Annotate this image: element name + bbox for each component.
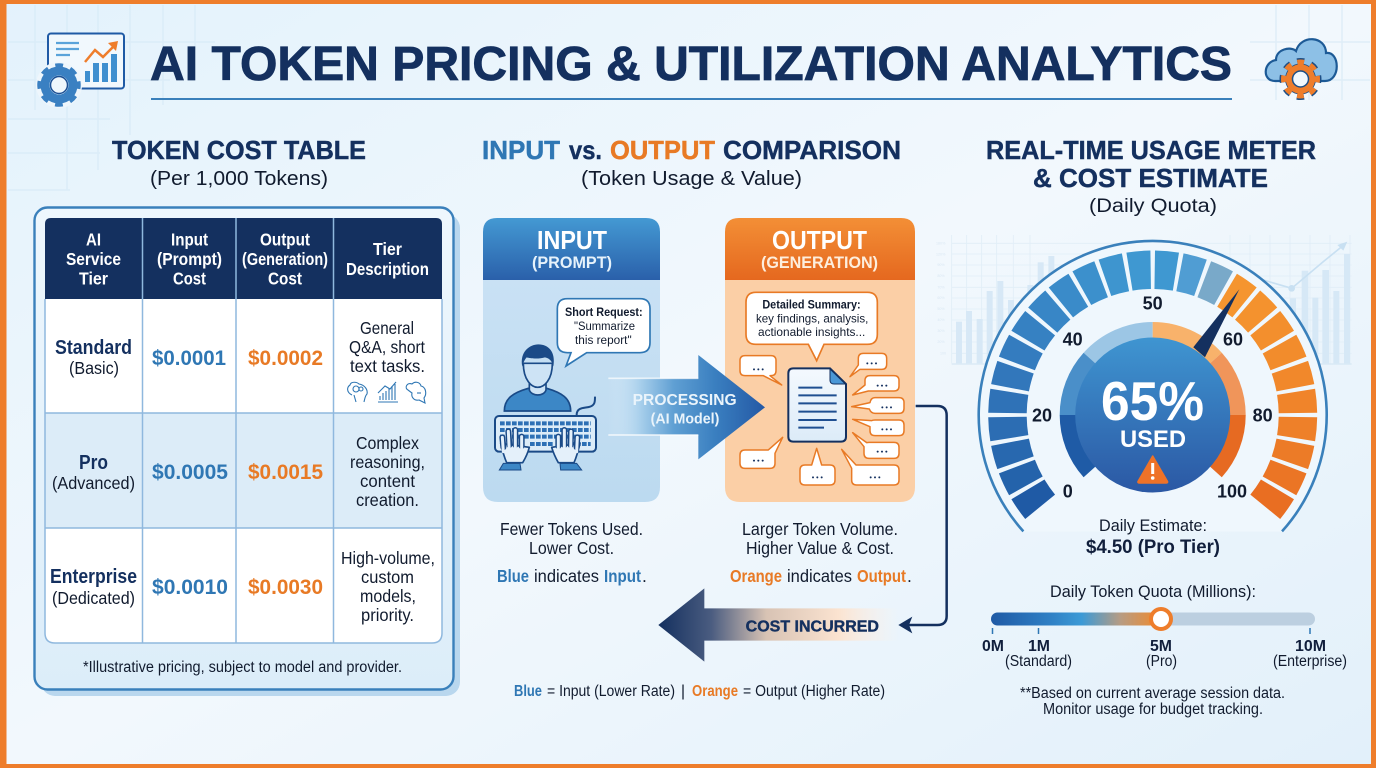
caption: input: Fewer Tokens Used. <box>500 519 643 539</box>
legend: rates <box>514 683 885 700</box>
legend: rates: Blue <box>514 683 542 700</box>
panel: input prompt: (PROMPT) <box>532 253 612 272</box>
row: pro: $0.0005 <box>152 461 228 484</box>
caption: input: Input <box>604 566 641 586</box>
table header: Input <box>171 230 208 250</box>
row: pro: reasoning, <box>350 452 425 472</box>
daily estimate: $4.50 (Pro Tier) <box>1086 536 1220 558</box>
small response bubbles <box>740 353 904 485</box>
background chart behind gauge: 180% <box>936 241 946 245</box>
background chart behind gauge <box>936 235 1352 364</box>
caption: output: indicates <box>787 566 852 586</box>
table header: Cost <box>173 268 206 288</box>
table rows <box>45 299 442 643</box>
row: enterprise: priority. <box>361 605 414 625</box>
caption: output <box>730 519 912 586</box>
speech bubble: short request: "Summarize <box>574 319 635 333</box>
usage footnote: **Based on current average session data. <box>1020 685 1285 702</box>
panel: input prompt: INPUT <box>537 225 607 255</box>
row: standard: General <box>360 318 414 338</box>
heading: real-time usage meter: & COST ESTIMATE <box>1033 163 1268 193</box>
background chart behind gauge: 100 <box>940 351 946 355</box>
caption: input: indicates <box>534 566 599 586</box>
slider: daily token quota: 10M <box>1295 638 1326 655</box>
row: standard: $0.0001 <box>152 347 226 370</box>
row: enterprise <box>50 548 435 625</box>
heading: input vs output comparison <box>482 135 901 190</box>
background chart behind gauge: 70% <box>937 285 945 289</box>
row: enterprise: High-volume, <box>341 548 435 568</box>
gauge segments <box>986 248 1319 520</box>
card <box>34 208 454 690</box>
bubble dots <box>753 362 892 478</box>
title: AI TOKEN PRICING & UTILIZATION ANALYTICS <box>150 38 1232 91</box>
table footnote: *Illustrative pricing, subject to model and provider. <box>83 659 402 676</box>
panel: output generation: (GENERATION) <box>761 253 878 272</box>
row: standard <box>55 318 426 403</box>
arrow: processing <box>608 355 765 459</box>
title underline <box>151 98 1232 100</box>
gauge <box>979 241 1327 531</box>
row: standard: text tasks. <box>350 356 425 376</box>
row: pro: $0.0015 <box>248 461 323 484</box>
gauge scale labels: 60 <box>1223 330 1243 350</box>
slider: daily token quota: (Pro) <box>1146 653 1177 670</box>
slider: daily token quota: 0M <box>982 638 1004 655</box>
caption: output: Higher Value & Cost. <box>746 538 894 558</box>
heading: input vs output comparison: (Token Usage & Value) <box>581 168 802 190</box>
gauge scale labels: 80 <box>1253 406 1273 426</box>
icon: document <box>788 368 846 442</box>
row: standard: (Basic) <box>69 358 119 378</box>
background grid <box>8 5 1370 190</box>
heading: input vs output comparison: COMPARISON <box>723 135 901 165</box>
row: standard: Standard <box>55 337 132 359</box>
heading: input vs output comparison: OUTPUT <box>610 135 715 165</box>
row: pro: Pro <box>79 452 108 474</box>
heading: token cost table <box>112 135 366 190</box>
legend: rates: = Output (Higher Rate) <box>743 683 885 700</box>
background chart behind gauge: 20% <box>937 340 945 344</box>
row: enterprise: $0.0010 <box>152 576 228 599</box>
row: standard: Q&A, short <box>349 337 425 357</box>
table header: (Prompt) <box>157 249 222 269</box>
speech bubble: short request: Short Request: <box>565 305 643 319</box>
background chart behind gauge: 60% <box>937 296 945 300</box>
card shadow <box>41 214 460 696</box>
legend: rates: | <box>681 683 685 700</box>
legend: rates: Orange <box>692 683 738 700</box>
heading: token cost table: TOKEN COST TABLE <box>112 135 366 165</box>
gauge scale labels <box>1032 294 1273 502</box>
row: pro: Complex <box>356 433 419 453</box>
caption: output: . <box>907 566 912 586</box>
slider: daily token quota: 1M <box>1028 638 1050 655</box>
gauge needle <box>1193 289 1239 357</box>
background chart behind gauge: 50% <box>937 307 945 311</box>
connector from output to cost <box>907 406 947 625</box>
row: pro: (Advanced) <box>52 473 135 493</box>
speech bubble: detailed summary: Detailed Summary: <box>762 298 861 311</box>
heading: real-time usage meter: (Daily Quota) <box>1089 196 1217 217</box>
gauge ring <box>979 241 1327 531</box>
table header: Tier <box>79 268 108 288</box>
slider: daily token quota: (Enterprise) <box>1273 653 1347 670</box>
table header: Cost <box>268 268 302 288</box>
background chart behind gauge: 30% <box>937 329 945 333</box>
row: enterprise: Enterprise <box>50 566 137 588</box>
speech bubble: short request <box>557 299 650 366</box>
arrow: cost incurred <box>658 406 947 662</box>
row: pro: content <box>360 471 415 491</box>
row: pro <box>52 433 425 510</box>
gauge value: 65% <box>1101 370 1204 432</box>
heading: real-time usage meter: REAL-TIME USAGE METER <box>986 135 1316 165</box>
caption: output: Orange <box>730 566 782 586</box>
table grid <box>45 299 442 643</box>
table header: (Generation) <box>242 249 328 269</box>
speech bubble: detailed summary: key findings, analysis, <box>756 312 868 325</box>
speech bubble: detailed summary: actionable insights... <box>758 326 865 339</box>
row: enterprise: $0.0030 <box>248 576 323 599</box>
inner progress ring <box>1060 322 1246 477</box>
daily estimate <box>1086 516 1220 558</box>
speech bubble: detailed summary <box>746 292 877 361</box>
arrow: processing: PROCESSING <box>633 392 737 409</box>
daily estimate: Daily Estimate: <box>1099 516 1207 535</box>
panel: output generation: OUTPUT <box>772 225 867 255</box>
slider: daily token quota: Daily Token Quota (Millions): <box>1050 582 1256 601</box>
slider: daily token quota: 5M <box>1150 638 1172 655</box>
slider: daily token quota: (Standard) <box>1005 653 1072 670</box>
background chart behind gauge: 40% <box>937 318 945 322</box>
panel: token cost table <box>34 208 460 696</box>
background chart behind gauge: 80% <box>937 274 945 278</box>
table header <box>45 218 442 299</box>
arrow: processing: (AI Model) <box>651 411 720 427</box>
row: enterprise: (Dedicated) <box>52 588 135 608</box>
panel: input prompt <box>483 218 660 502</box>
icon: warning <box>1138 456 1168 483</box>
caption: input: Blue <box>497 566 529 586</box>
slider: daily token quota <box>982 582 1347 670</box>
icon: cloud with gear <box>1266 39 1337 96</box>
caption: output: Larger Token Volume. <box>742 519 898 539</box>
heading: real-time usage meter <box>986 135 1316 217</box>
usage footnote: Monitor usage for budget tracking. <box>1043 701 1263 718</box>
table header: Tier <box>373 239 402 259</box>
usage footnote <box>1020 685 1285 718</box>
table header: Description <box>346 259 429 279</box>
heading: input vs output comparison: vs. <box>569 135 602 165</box>
gauge scale labels: 50 <box>1143 294 1163 314</box>
table header: AI <box>86 230 101 250</box>
row: enterprise: models, <box>360 586 416 606</box>
background chart behind gauge: 90% <box>937 263 945 267</box>
gauge scale labels: 40 <box>1063 330 1083 350</box>
gauge scale labels: 100 <box>1217 482 1247 502</box>
icons: brain, chart, chat <box>348 382 426 403</box>
legend: rates: = Input (Lower Rate) <box>547 683 675 700</box>
table header: Output <box>260 230 310 250</box>
heading: token cost table: (Per 1,000 Tokens) <box>150 168 328 190</box>
heading: input vs output comparison: INPUT <box>482 135 560 165</box>
background chart behind gauge: 120% <box>936 252 946 256</box>
gauge hub <box>1075 338 1230 492</box>
gauge label: USED <box>1120 426 1186 453</box>
gauge scale labels: 0 <box>1063 482 1073 502</box>
caption: input: . <box>642 566 647 586</box>
caption: input <box>497 519 647 586</box>
gauge scale labels: 20 <box>1032 406 1052 426</box>
caption: output: Output <box>857 566 906 586</box>
row: pro: creation. <box>356 490 419 510</box>
panel: output generation <box>725 218 915 502</box>
row: standard: $0.0002 <box>248 347 323 370</box>
row: enterprise: custom <box>361 567 414 587</box>
icon: dashboard with gear <box>36 34 124 108</box>
speech bubble: short request: this report" <box>575 333 632 347</box>
table header: Service <box>66 249 121 269</box>
caption: input: Lower Cost. <box>529 538 614 558</box>
arrow: cost incurred: COST INCURRED <box>746 619 879 636</box>
icon: person at keyboard <box>495 344 596 470</box>
